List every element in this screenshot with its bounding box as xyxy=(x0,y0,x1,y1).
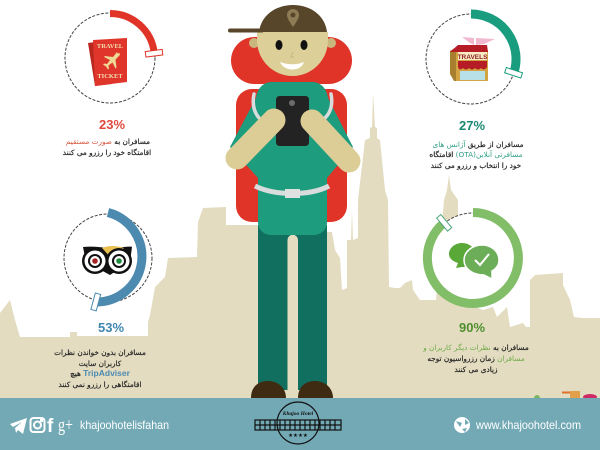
small colourful town at the horizon xyxy=(534,391,597,401)
arc end marker blue xyxy=(91,293,101,311)
stat 23%: 23% xyxy=(99,117,125,132)
arms xyxy=(237,120,349,161)
description 23% xyxy=(63,137,151,157)
icon: telegram xyxy=(10,418,27,434)
footer bar xyxy=(0,398,600,450)
arc end marker green xyxy=(437,215,452,231)
icon: facebook: f xyxy=(47,416,54,437)
icon: instagram xyxy=(30,418,44,432)
description 90%: زیادی می کنند xyxy=(454,365,498,374)
stat 53%: 53% xyxy=(98,320,124,335)
icon: google plus: g+ xyxy=(58,415,73,436)
shoes xyxy=(251,381,333,398)
description 27% xyxy=(429,139,524,170)
phone xyxy=(276,96,309,146)
icon: chat bubbles xyxy=(449,243,499,279)
stat 90%: 90% xyxy=(459,320,485,335)
panel: TripAdvisor 53% xyxy=(54,212,152,389)
description 53% xyxy=(54,348,146,389)
backpack body xyxy=(236,89,347,222)
description 23%: مسافران به صورت مستقیم xyxy=(66,137,150,146)
stat 27%: 27% xyxy=(459,118,485,133)
description 53%: اقامتگاهی را رزرو نمی کنند xyxy=(58,380,142,389)
hotel logo xyxy=(255,402,341,444)
panel: OTA booking 27% xyxy=(426,14,524,170)
description 90%: مسافران به نظرات دیگر کاربران و xyxy=(422,343,529,352)
icon: travel shop: TRAVELS xyxy=(458,54,488,61)
trousers xyxy=(258,225,327,390)
icon: travel ticket: TRAVEL xyxy=(97,43,124,50)
description 53%: کاربران سایت xyxy=(79,359,122,368)
icon: owl xyxy=(82,246,132,275)
description 90% xyxy=(422,343,529,374)
hotel logo: ★★★★ xyxy=(288,433,308,439)
panel: reviews 90% xyxy=(422,212,529,374)
description 27%: مسافران از طریق آژانس های xyxy=(432,139,524,149)
arc end marker red xyxy=(145,49,163,57)
progress arc teal xyxy=(471,14,516,73)
neck pillow xyxy=(231,37,352,84)
head xyxy=(249,32,336,76)
progress arc green xyxy=(427,212,518,303)
belt xyxy=(255,186,329,198)
backpack straps xyxy=(253,94,332,118)
traveller figure xyxy=(228,5,353,398)
footer handle: khajoohotelisfahan xyxy=(80,418,169,432)
description 23%: اقامتگاه خود را رزرو می کنند xyxy=(63,148,151,157)
description 53%: TripAdviser هیچ xyxy=(70,368,131,378)
panel: direct booking 23% xyxy=(63,13,163,157)
background skyline xyxy=(0,93,600,398)
icon: travel ticket xyxy=(88,38,127,86)
progress arc blue xyxy=(96,212,142,302)
description 27%: مسافرتی آنلاین(OTA) اقامتگاه xyxy=(429,149,523,159)
footer website: www.khajoohotel.com xyxy=(475,418,581,432)
hotel logo: Khajoo Hotel xyxy=(282,411,314,417)
icon: travel ticket: TICKET xyxy=(97,73,123,80)
description 90%: مسافران زمان رزرواسیون توجه xyxy=(427,354,525,363)
description 27%: خود را انتخاب و رزرو می کنند xyxy=(431,161,521,170)
icon: globe xyxy=(454,417,470,433)
description 53%: مسافران بدون خواندن نظرات xyxy=(54,348,146,357)
progress arc red xyxy=(110,13,154,53)
arc end marker teal xyxy=(505,68,523,78)
shirt with sleeves xyxy=(230,82,353,235)
cap with location pin xyxy=(228,5,327,32)
icon: travel shop xyxy=(450,37,495,81)
